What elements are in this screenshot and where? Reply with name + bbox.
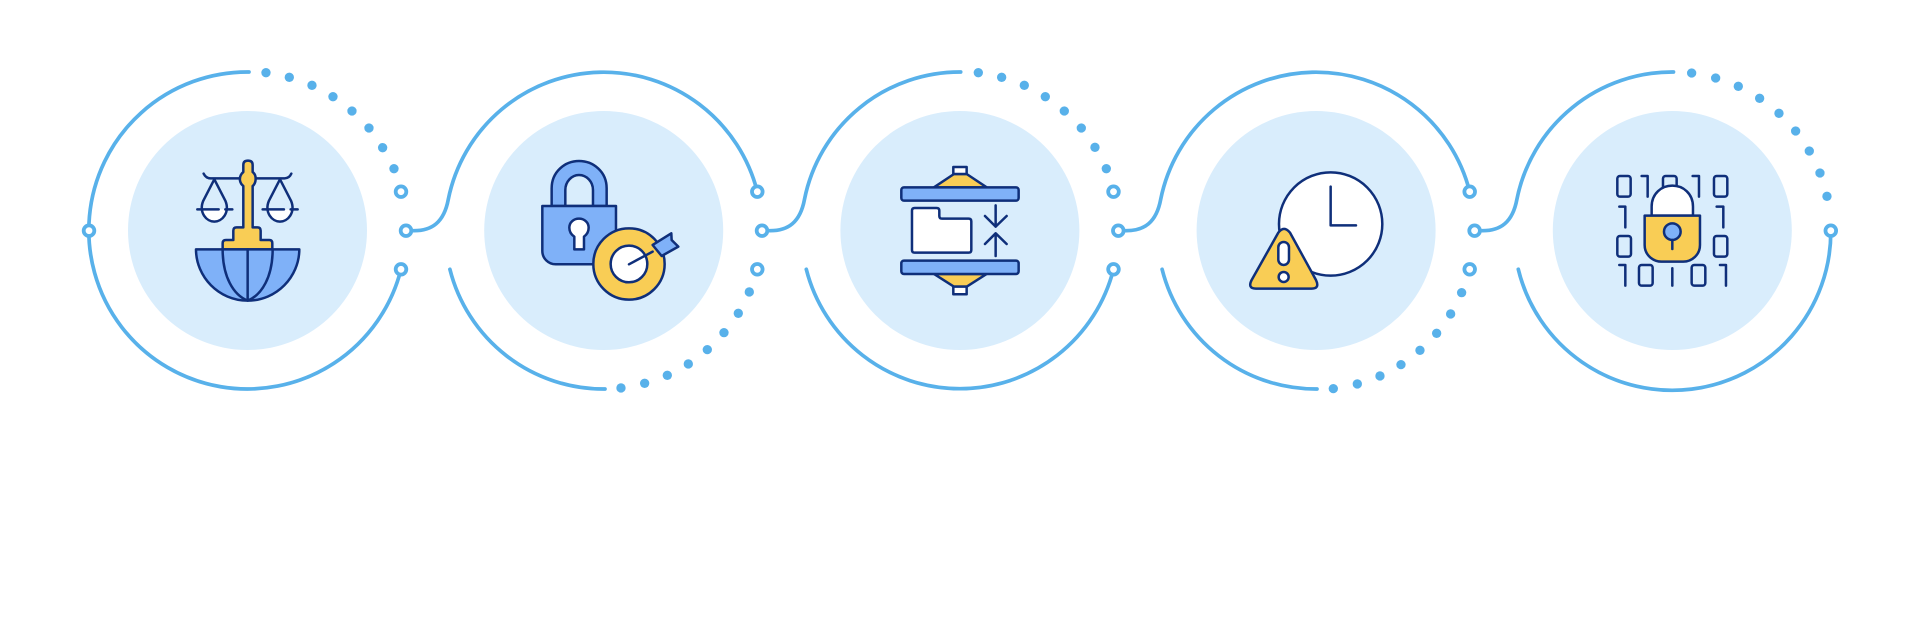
panel: step 5 binary lock <box>1518 68 1836 390</box>
nodes 2 <box>752 186 767 275</box>
dotted arc 1 <box>261 68 399 173</box>
nodes 4 <box>1464 186 1480 275</box>
node 5 <box>1826 225 1836 236</box>
nodes 3 <box>1108 186 1124 275</box>
dotted arc 2 <box>616 287 754 393</box>
panel: step 3 file compression <box>806 68 1124 389</box>
icon: folder in compression press <box>901 167 1019 294</box>
icon: scales of justice on globe <box>196 161 299 301</box>
dotted arc 4 <box>1329 288 1466 393</box>
icon: padlock and target <box>542 161 678 300</box>
dotted arc 5 <box>1687 68 1832 201</box>
dotted arc 3 <box>974 68 1111 173</box>
panel: step 2 targeted lock <box>450 111 767 393</box>
connector 3 to 4 with ring arc <box>1125 72 1470 231</box>
background disc 1 <box>128 111 367 350</box>
background disc 5 <box>1553 111 1792 350</box>
lower ring arc 2 <box>450 269 605 389</box>
icon: padlock with binary digits <box>1617 176 1727 286</box>
lower ring arc 3 <box>806 269 1114 389</box>
background disc 4 <box>1197 111 1436 350</box>
background disc 2 <box>484 111 723 350</box>
background disc 3 <box>840 111 1079 350</box>
connector 4 to 5 with ring arc <box>1482 72 1674 231</box>
connector 2 to 3 with ring arc <box>769 72 961 231</box>
panel: step 4 time warning <box>1162 111 1480 393</box>
connector 1 to 2 with ring arc <box>413 72 757 231</box>
icon: clock with warning triangle <box>1250 172 1382 289</box>
ring arc 1 <box>89 72 401 389</box>
panel: step 1 global law <box>84 68 411 389</box>
lower ring arc 5 <box>1518 231 1831 390</box>
lower ring arc 4 <box>1162 269 1317 389</box>
nodes 1 <box>84 186 411 275</box>
